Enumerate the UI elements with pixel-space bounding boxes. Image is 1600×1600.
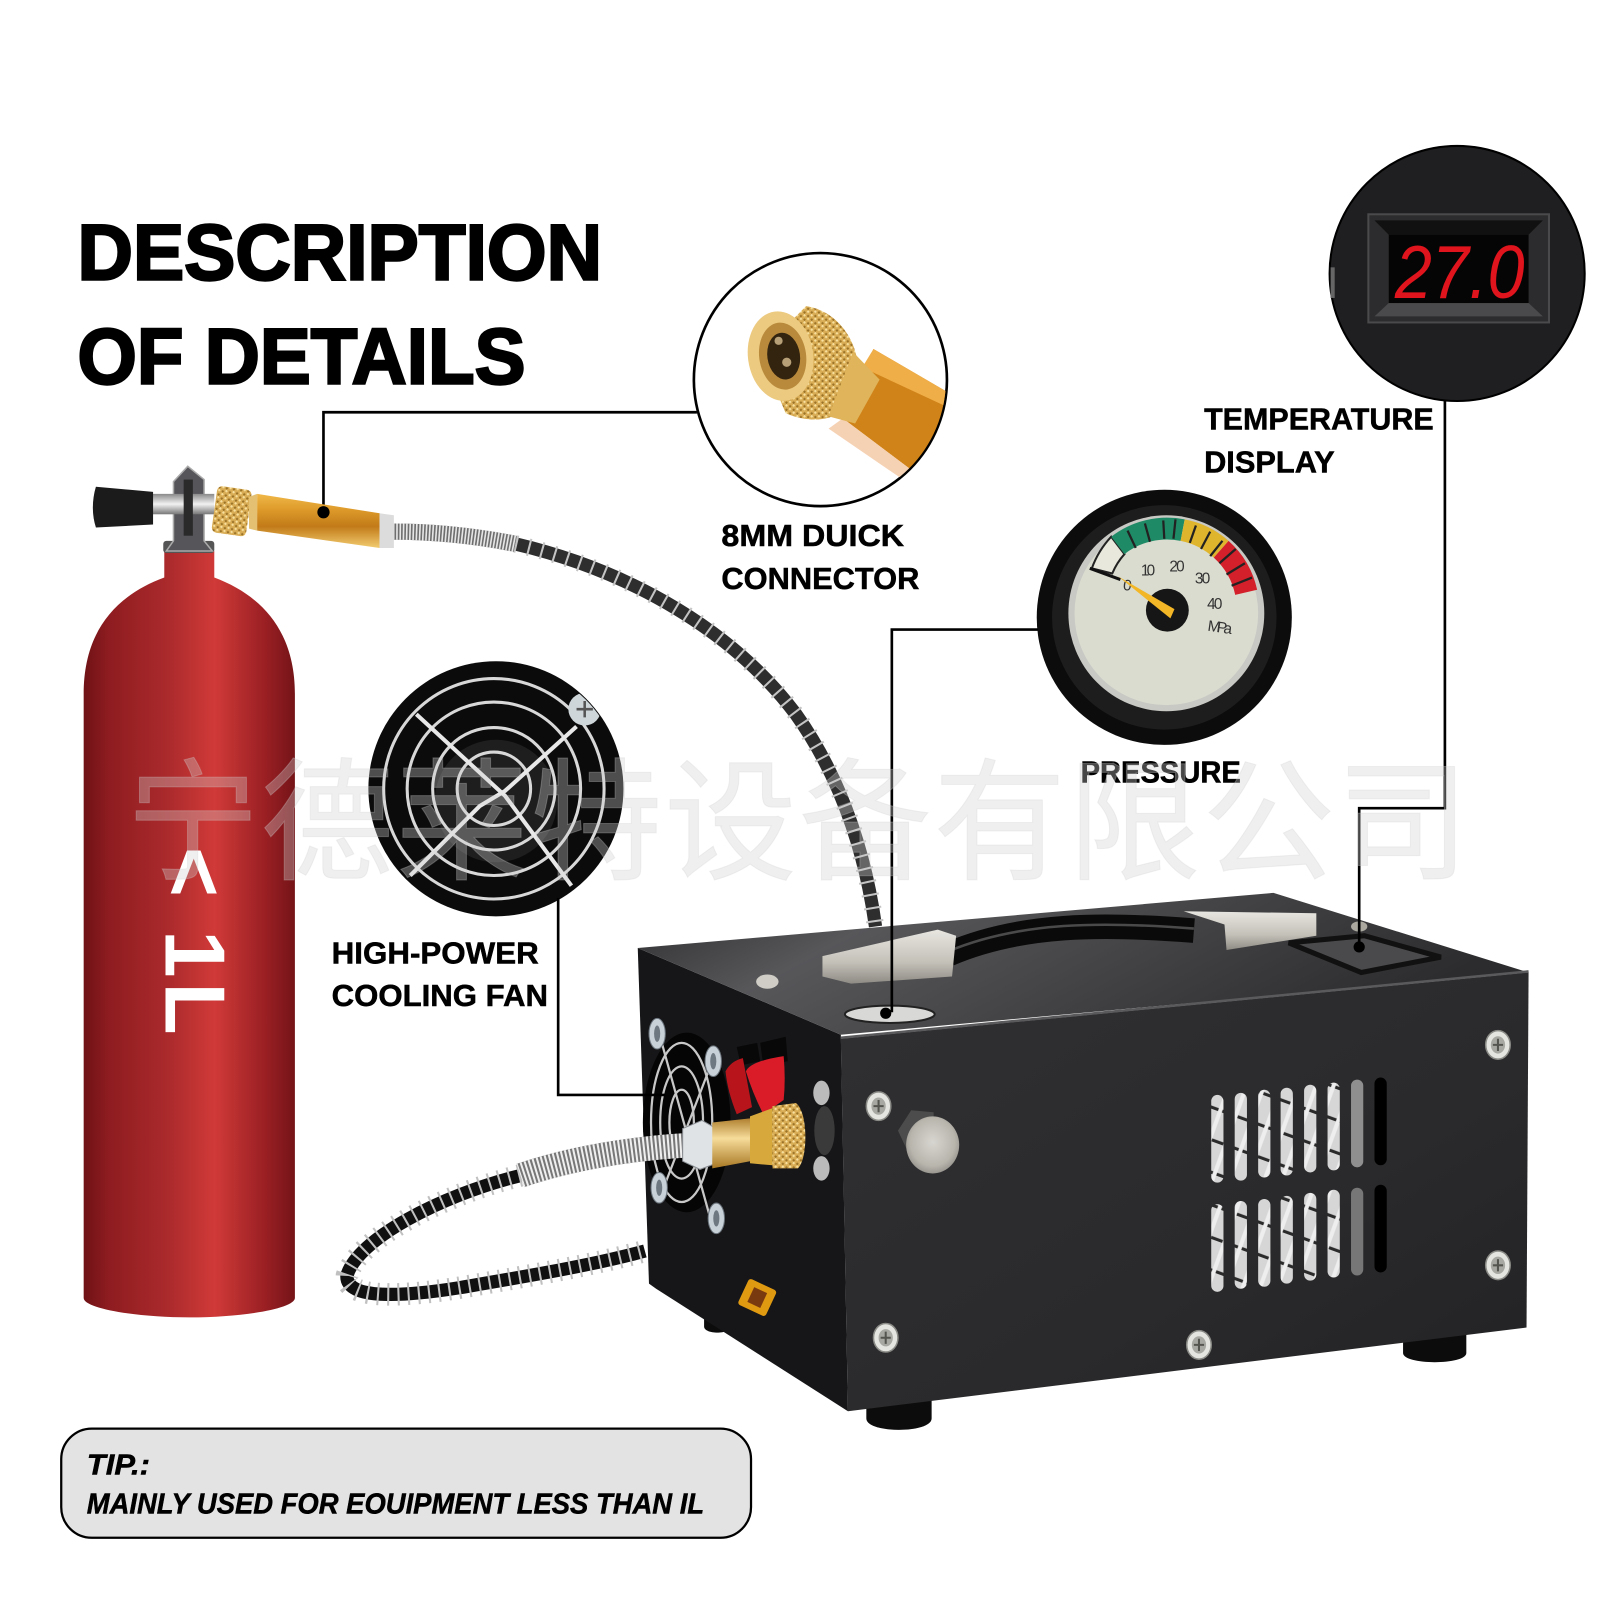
left side panel bbox=[638, 948, 848, 1411]
top display window bbox=[1289, 936, 1441, 972]
leader line: connector bbox=[323, 412, 697, 512]
front knob bbox=[898, 1110, 959, 1173]
bottle capacity mark: < 1L bbox=[146, 847, 242, 1035]
ventilation slots bbox=[1211, 1078, 1387, 1292]
title: DESCRIPTION bbox=[78, 209, 602, 297]
gauge needle bbox=[1090, 568, 1174, 618]
detail circle: temperature display bbox=[1330, 146, 1585, 401]
detail circle: 8mm quick connector bbox=[694, 253, 954, 506]
side panel terminal screws bbox=[813, 1081, 835, 1181]
label: high-power cooling fan: HIGH-POWER bbox=[332, 936, 539, 970]
gauge pivot bbox=[1146, 589, 1189, 632]
handle-side screws bbox=[756, 921, 1367, 989]
power switches bbox=[726, 1037, 788, 1114]
title: OF DETAILS bbox=[78, 313, 526, 401]
bottle body bbox=[84, 551, 295, 1317]
gauge scale labels: 40 bbox=[1207, 596, 1222, 613]
rubber feet bbox=[704, 1306, 1466, 1430]
top panel bbox=[638, 893, 1529, 1035]
tip text bbox=[87, 1449, 704, 1520]
label: temperature display: DISPLAY bbox=[1204, 445, 1335, 479]
tip text: MAINLY USED FOR EOUIPMENT LESS THAN IL bbox=[87, 1488, 704, 1520]
fan grille rings bbox=[384, 679, 604, 899]
gauge scale labels: 10 bbox=[1141, 563, 1155, 580]
connector mouth bbox=[748, 311, 814, 401]
valve knob bbox=[93, 487, 153, 528]
leader line: temperature bbox=[1354, 401, 1445, 953]
hex bar bbox=[846, 349, 946, 468]
display bezel bbox=[1368, 214, 1549, 322]
label: pressure: PRESSURE bbox=[1081, 756, 1241, 790]
gauge scale labels: 20 bbox=[1169, 558, 1185, 575]
XT power connector bbox=[737, 1278, 777, 1317]
tip box bbox=[61, 1429, 751, 1538]
bottle valve bbox=[93, 466, 214, 553]
knurled collar bbox=[780, 306, 856, 420]
compressor bbox=[638, 893, 1529, 1430]
display screen bbox=[1389, 235, 1529, 303]
label: high-power cooling fan: COOLING FAN bbox=[332, 979, 548, 1013]
front panel bbox=[841, 972, 1529, 1411]
oxygen bottle bbox=[84, 551, 295, 1317]
detail circle: cooling fan bbox=[368, 661, 623, 916]
label: 8mm quick connector bbox=[721, 519, 919, 596]
label: temperature display: TEMPERATURE bbox=[1204, 403, 1434, 437]
detail circle: pressure gauge bbox=[1037, 490, 1292, 745]
label: 8mm quick connector: 8MM DUICK bbox=[721, 519, 904, 553]
brass outlet fitting bbox=[683, 1103, 805, 1169]
upper braided hose bbox=[393, 532, 876, 927]
fan grille cross wires bbox=[410, 714, 577, 886]
pressure gauge port bbox=[845, 1006, 935, 1023]
tip text: TIP.: bbox=[87, 1449, 150, 1481]
gauge scale labels: MPa bbox=[1207, 618, 1234, 638]
gauge colour arcs bbox=[1092, 518, 1257, 595]
gauge scale labels bbox=[1122, 558, 1234, 638]
gauge scale labels: 30 bbox=[1195, 571, 1210, 588]
gauge scale labels: 0 bbox=[1122, 577, 1133, 595]
brass quick connector on bottle bbox=[211, 486, 394, 548]
front panel screws bbox=[866, 1031, 1510, 1359]
leader line: cooling fan bbox=[558, 898, 665, 1095]
watermark: 宁德莱特设备有限公司 bbox=[127, 750, 1469, 898]
label: high-power cooling fan bbox=[332, 936, 548, 1013]
temperature reading: 27.0 bbox=[1394, 231, 1524, 315]
label: 8mm quick connector: CONNECTOR bbox=[721, 562, 919, 596]
side cooling fan bbox=[643, 1018, 731, 1234]
label: temperature display bbox=[1204, 403, 1434, 479]
fan mounting screw bbox=[568, 693, 601, 726]
lower braided hose bbox=[347, 1145, 694, 1294]
title bbox=[78, 209, 602, 401]
leader line: pressure bbox=[880, 630, 1038, 1019]
carry handle bbox=[822, 911, 1316, 984]
